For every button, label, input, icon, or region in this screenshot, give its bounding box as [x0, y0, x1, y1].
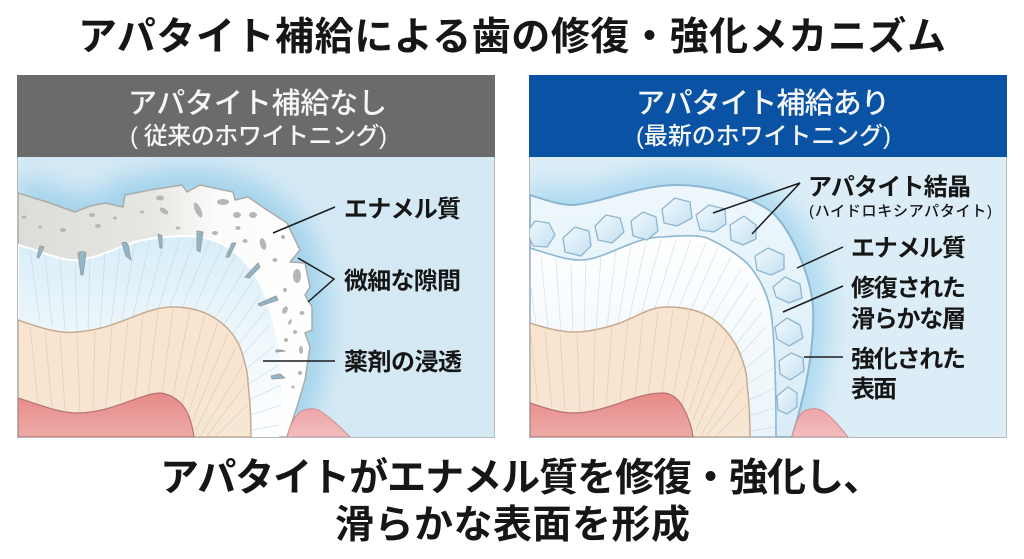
label: repaired smooth layer: 修復された [851, 275, 966, 302]
header bar: without apatite: ( 従来のホワイトニング) [130, 123, 387, 150]
pulp [530, 393, 693, 437]
pulp [18, 393, 194, 437]
label: enamel: エナメル質 [851, 235, 966, 262]
panel: with apatite [526, 75, 1007, 438]
label: enamel [273, 196, 461, 233]
label: micro gaps: 微細な隙間 [344, 268, 461, 295]
dentin [18, 236, 283, 437]
panel background [530, 76, 1006, 438]
label: apatite crystals: (ハイドロキシアパタイト) [809, 203, 992, 220]
label: repaired smooth layer [783, 275, 966, 333]
label: enamel [797, 235, 966, 268]
label: micro gaps [298, 258, 461, 302]
pulp chamber wall [530, 307, 750, 437]
title: アパタイト補給による歯の修復・強化メカニズム [78, 16, 946, 59]
micro gaps [37, 231, 285, 379]
conclusion text [160, 457, 882, 547]
enamel [18, 185, 312, 437]
header bar: with apatite [529, 75, 1007, 157]
conclusion text: アパタイトがエナメル質を修復・強化し、 [160, 457, 882, 500]
label: agent penetration: 薬剤の浸透 [344, 349, 462, 376]
gum [287, 409, 350, 437]
illustration: damaged tooth [18, 185, 350, 437]
label: strengthened surface: 強化された [851, 346, 966, 373]
label: apatite crystals: アパタイト結晶 [808, 174, 971, 201]
dentin tubules [30, 238, 281, 430]
pulp radial lines [530, 309, 747, 437]
panel: without apatite [17, 75, 495, 438]
label: enamel: エナメル質 [344, 196, 461, 223]
pulp chamber wall [18, 307, 251, 437]
label: apatite crystals [713, 174, 992, 234]
enamel pores [22, 196, 304, 388]
dentin tubules [526, 240, 777, 432]
label: strengthened surface [804, 346, 966, 403]
pulp radial lines [30, 309, 247, 437]
dentin [530, 236, 776, 437]
header bar: without apatite: アパタイト補給なし [128, 87, 387, 120]
conclusion text: 滑らかな表面を形成 [335, 504, 690, 547]
label: repaired smooth layer: 滑らかな層 [851, 306, 966, 333]
label: strengthened surface: 表面 [851, 376, 897, 403]
header bar: with apatite: アパタイト補給あり [636, 87, 890, 120]
restored enamel layer [530, 185, 813, 437]
header bar: without apatite [17, 75, 495, 157]
header bar: with apatite: (最新のホワイトニング) [636, 123, 891, 150]
illustration: repaired tooth [526, 185, 848, 437]
gum [792, 409, 848, 437]
panel background [18, 76, 494, 438]
apatite crystals [527, 198, 804, 414]
